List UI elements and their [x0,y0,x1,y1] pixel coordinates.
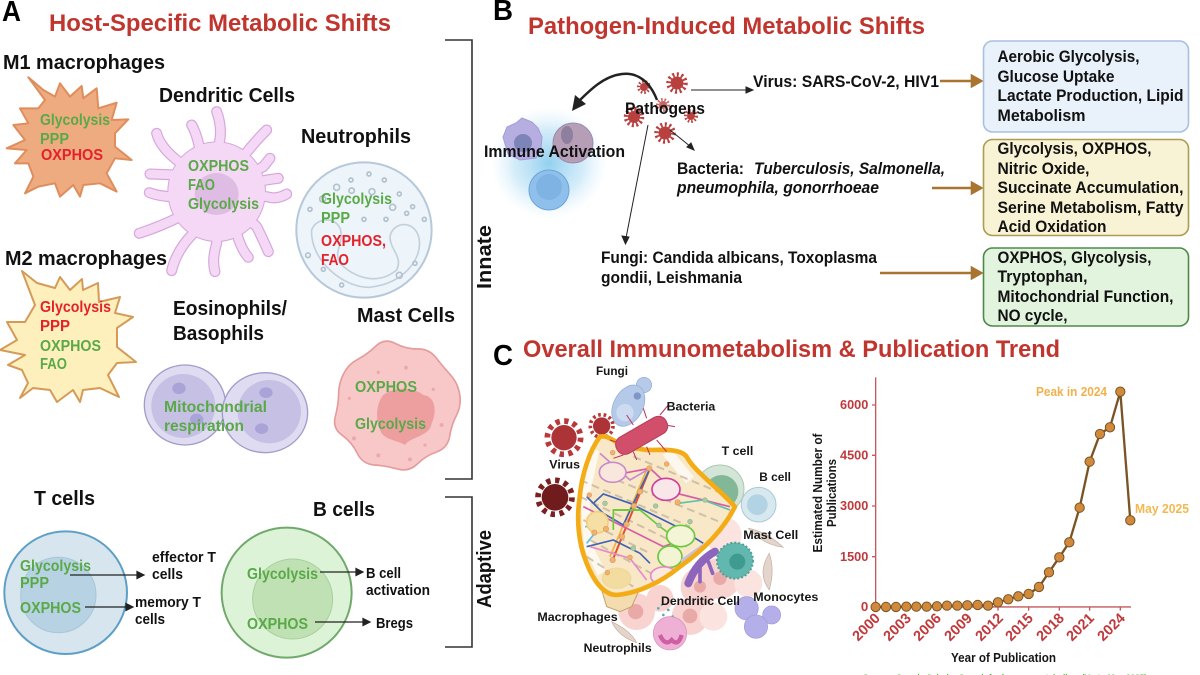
heading: Dendritic Cells: Dendritic Cells [159,85,295,107]
M2 metabolic labels: PPP [40,318,70,335]
label: B cell activation: activation [366,582,430,599]
icon: immune cells with glow [491,107,607,219]
dendritic metabolic labels: FAO [188,177,215,194]
Dendritic cell [139,85,295,272]
label: fungi pathogens: gondii, Leishmania [601,269,743,287]
annotation: May 2025: May 2025 [1135,501,1189,516]
heading: Neutrophils: Neutrophils [301,126,411,148]
y-axis title: Publications [824,459,839,527]
x-axis tick labels: 2003 [881,611,915,645]
label: memory T cells: cells [135,611,165,628]
icon: macrophage [602,588,640,612]
data line [876,392,1130,607]
arrow: to virus [691,87,753,93]
x-axis tick labels: 2000 [850,611,884,645]
box: bacteria metabolism: Glycolysis, OXPHOS, [998,140,1152,158]
heading: M2 macrophages: M2 macrophages [5,248,167,270]
eosinophil metabolic label [164,399,267,435]
heading: B cells: B cells [313,499,375,521]
M1 metabolic labels: Glycolysis [40,112,110,129]
labels: cell and pathogen names: Dendritic Cell [661,594,740,608]
icon: B cell [741,487,776,522]
chart axes and data, in zoomed coordinates [840,377,1135,614]
M2 macrophage cell [0,248,167,402]
box: bacteria metabolism [984,140,1188,236]
icon: purple dendritic cell [688,552,715,583]
label: Immune Activation: Immune Activation [484,143,625,161]
y-axis tick labels: 0 [861,599,868,614]
M1 metabolic labels [40,112,110,164]
icon: bacteria [610,405,675,460]
arrow: to effector T cells [70,572,144,578]
mast cell metabolic labels: OXPHOS [355,379,417,396]
mast cell metabolic labels [355,379,426,433]
metabolic map in golden shield [578,436,735,595]
label: bacteria pathogens: pneumophila, gonorrhoeae [676,179,879,197]
x-axis tick labels: 2012 [973,611,1007,645]
labels: cell and pathogen names: T cell [722,444,753,458]
x-axis tick labels: 2006 [911,611,945,645]
B cell metabolic labels: OXPHOS [247,616,308,633]
labels: cell and pathogen names: B cell [759,470,791,484]
illustration: metabolic map surrounded by cells and pathogens [537,364,818,655]
box: bacteria metabolism: Acid Oxidation [998,218,1106,236]
neutrophil metabolic labels: FAO [321,252,349,269]
arrow: to B cell activation [320,568,363,576]
bracket: innate [445,40,472,479]
x-axis tick labels: 2015 [1003,611,1037,645]
icon: viruses [538,415,613,514]
arrow: to memory T cells [85,604,133,610]
label: bacteria pathogens: Bacteria: [677,160,744,178]
label: virus pathogens: Virus: SARS-CoV-2, HIV1 [753,73,939,91]
icon: nuclei [628,572,727,623]
label: effector T cells [152,549,216,583]
M1 metabolic labels: PPP [40,131,69,148]
Mast cell [335,305,460,470]
x-axis tick labels: 2018 [1034,611,1068,645]
label: Adaptive: Adaptive [474,530,496,608]
arrow: to fungi [622,125,648,244]
labels: cell and pathogen names: Bacteria [667,400,715,414]
M2 metabolic labels: OXPHOS [40,338,101,355]
box: fungi metabolism: NO cycle, [998,307,1068,325]
heading: T cells: T cells [34,488,95,510]
icon: pathogens cluster [626,74,696,142]
label: memory T cells: memory T [135,594,201,611]
icon: stromal cells [748,528,783,590]
Neutrophil cell [296,126,432,298]
labels: cell and pathogen names: Mast Cell [743,528,798,542]
heading: Eosinophils/Basophils: Eosinophils/ [173,298,287,320]
label: Pathogens: Pathogens [625,100,705,118]
labels: cell and pathogen names: Monocytes [753,590,818,604]
panel B: pathogen-induced metabolic shifts [484,0,1188,326]
label: memory T cells [135,594,201,628]
panel C: overall immunometabolism and publication trend [493,336,1189,675]
heading: Eosinophils/Basophils: Basophils [173,323,264,345]
M2 metabolic labels: Glycolysis [40,299,111,316]
x-axis tick labels: 2009 [942,611,976,645]
label: Innate: Innate [474,225,496,289]
B cell metabolic labels [247,566,318,633]
M2 metabolic labels [40,299,111,373]
data points [871,387,1135,612]
M1 metabolic labels: OXPHOS [41,147,103,164]
box: bacteria metabolism: Nitric Oxide, [998,160,1090,178]
label: effector T cells: cells [152,566,183,583]
icon: granule cell dots [657,604,674,618]
title: Host-Specific Metabolic Shifts: Host-Specific Metabolic Shifts [49,10,391,37]
labels: cell and pathogen names: Fungi [596,364,628,378]
icon: fungi [605,377,652,432]
axes [872,377,1131,611]
label: bacteria pathogens [676,160,945,197]
dendritic metabolic labels: Glycolysis [188,196,259,213]
bracket: adaptive [445,497,472,647]
icon: T cell [4,531,127,654]
icon: paired granulocytes [144,365,308,453]
labels: cell and pathogen names: Virus [549,457,580,471]
box: bacteria metabolism: Succinate Accumulation, [998,179,1184,197]
arrow: virus to box [940,76,981,86]
box: fungi metabolism: OXPHOS, Glycolysis, [998,249,1152,267]
box: virus metabolism: Lactate Production, Lipid [998,87,1184,105]
box: virus metabolism: Glucose Uptake [998,68,1114,86]
label: B cell activation [366,565,430,599]
heading: Eosinophils/Basophils [173,298,287,345]
icon: B cell [222,528,352,658]
icon: monocytes [735,597,781,638]
eosinophil metabolic label: respiration [164,418,244,435]
arrow: to bacteria [670,130,694,150]
box: fungi metabolism [984,248,1188,326]
M2 metabolic labels: FAO [40,356,67,373]
B cell metabolic labels: Glycolysis [247,566,318,583]
label: B cell activation: B cell [366,565,401,582]
x-axis tick labels: 2024 [1095,611,1129,645]
heading: M1 macrophages: M1 macrophages [3,52,165,74]
box: virus metabolism [984,41,1188,132]
icon: T cell [696,465,744,513]
title: Pathogen-Induced Metabolic Shifts: Pathogen-Induced Metabolic Shifts [528,13,925,40]
icon: neutrophil [296,162,432,298]
title: Overall Immunometabolism & Publication Trend: Overall Immunometabolism & Publication Trend [523,336,1060,363]
panel A: host-specific metabolic shifts [0,0,496,658]
label: Bregs: Bregs [376,615,413,632]
icon: neutrophil [653,617,687,650]
icon: pink tissue cells [618,517,762,635]
y-axis tick labels: 1500 [840,549,868,564]
label: bacteria pathogens: Tuberculosis, Salmonella, [754,160,945,178]
box: bacteria metabolism: Serine Metabolism, Fatty [998,199,1184,217]
labels: cell and pathogen names: Macrophages [537,610,618,624]
panel letter C: C [493,340,513,372]
icon: M2 macrophage [0,271,136,402]
y-axis title [810,433,839,552]
x-axis tick labels: 2021 [1064,611,1098,645]
arrow: fungi to box [880,268,981,278]
neutrophil metabolic labels: PPP [321,210,350,227]
T cell metabolic labels: OXPHOS [20,600,81,617]
y-axis tick labels: 6000 [840,397,868,412]
B cell [222,499,430,658]
heading: Mast Cells: Mast Cells [357,305,455,327]
neutrophil metabolic labels [321,191,392,269]
icon: dendritic cell [139,112,287,272]
box: virus metabolism: Metabolism [998,107,1086,125]
x-axis tick labels [850,611,1129,645]
T cell [4,488,216,654]
icon: mast cell [335,341,460,470]
labels: cell and pathogen names [537,364,818,655]
icon: M1 macrophage [7,77,132,197]
box: virus metabolism: Aerobic Glycolysis, [998,48,1140,66]
arrow: to Bregs [315,618,370,626]
mast cell metabolic labels: Glycolysis [355,416,426,433]
eosinophil metabolic label: Mitochondrial [164,399,267,416]
neutrophil metabolic labels: OXPHOS, [321,233,386,250]
label: fungi pathogens [601,249,878,287]
neutrophil metabolic labels: Glycolysis [321,191,392,208]
annotation: peak in 2024: Peak in 2024 [1036,385,1107,399]
Eosinophil / basophil cells [144,298,308,453]
label: fungi pathogens: Fungi: Candida albicans, Toxoplasma [601,249,878,267]
y-axis tick labels [840,397,868,614]
line chart: publications per year [810,377,1189,675]
icon: elongated cell [612,622,637,643]
dendritic metabolic labels [188,158,259,213]
x-axis title: Year of Publication [951,650,1056,665]
box: fungi metabolism: Tryptophan, [998,268,1088,286]
M1 macrophage cell [3,52,165,197]
arrow: pathogens to immune activation [572,74,657,111]
T cell metabolic labels: PPP [20,575,49,592]
label: effector T cells: effector T [152,549,216,566]
icon: mast cell teal [717,543,753,579]
labels: cell and pathogen names: Neutrophils [584,641,652,655]
T cell metabolic labels: Glycolysis [20,558,91,575]
arrow: bacteria to box [932,183,981,193]
y-axis tick labels: 4500 [840,447,868,462]
dendritic metabolic labels: OXPHOS [188,158,249,175]
box: fungi metabolism: Mitochondrial Function, [998,288,1174,306]
y-axis title: Estimated Number of [810,433,825,552]
T cell metabolic labels [20,558,91,617]
y-axis tick labels: 3000 [840,498,868,513]
